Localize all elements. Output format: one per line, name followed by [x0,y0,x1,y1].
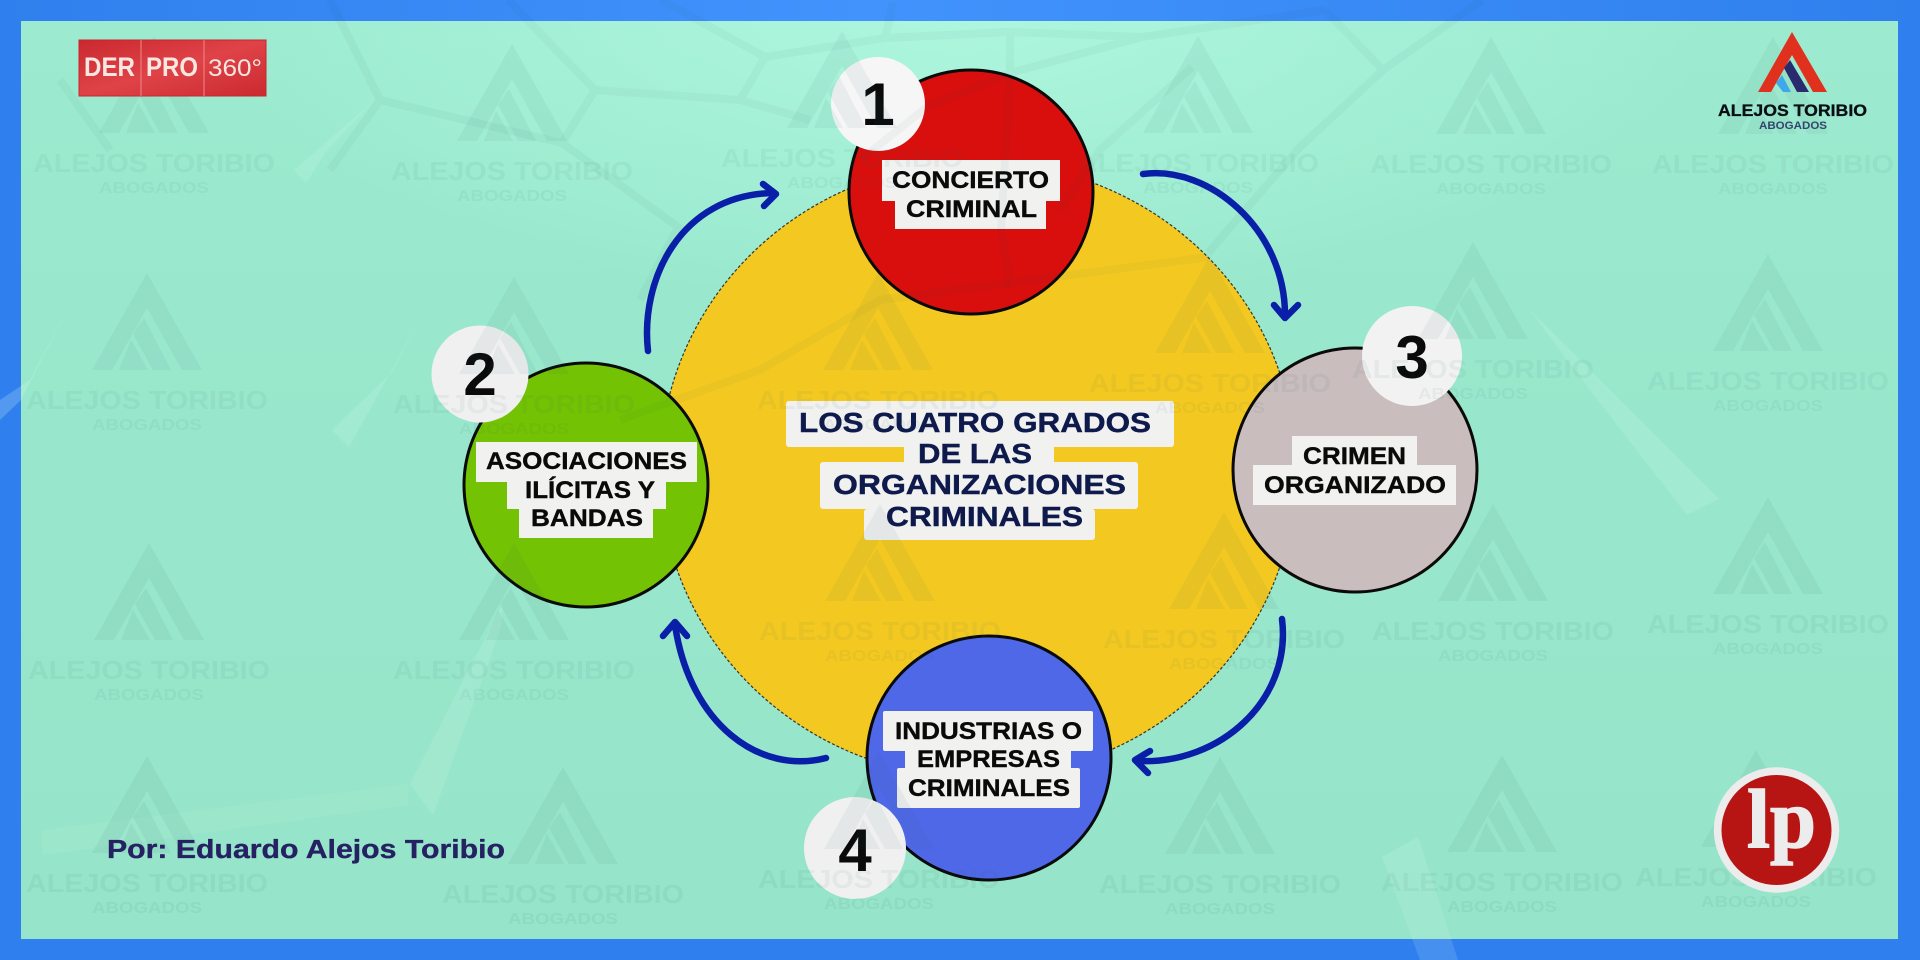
watermark logos pattern: ALEJOS TORIBIO [757,385,999,415]
number badge 1: 1 [861,71,895,138]
arrow: gray to blue [1135,619,1283,773]
watermark logos pattern: ABOGADOS [823,417,933,434]
number badge 2 [432,326,528,422]
watermark logos pattern: ABOGADOS [1418,386,1528,403]
number badge 4 [804,797,906,899]
watermark logos pattern: ALEJOS TORIBIO [721,143,963,173]
panel: industrias o empresas criminales [867,636,1111,880]
central yellow circle [660,162,1296,778]
watermark logos pattern: ABOGADOS [1447,899,1557,916]
watermark logos pattern: ABOGADOS [1713,641,1823,658]
watermark logos pattern: ABOGADOS [1713,398,1823,415]
watermark logos pattern: ALEJOS TORIBIO [442,879,684,909]
panel: concierto criminal [849,70,1093,314]
number badge 1 [831,57,925,151]
watermark logos pattern: ABOGADOS [824,896,934,913]
number badge 3 [1362,306,1462,406]
logo: Alejos Toribio Abogados [1718,32,1867,132]
logo: DER PRO 360 [79,40,266,96]
watermark logos pattern: ALEJOS TORIBIO [1635,862,1877,892]
central title: LOS CUATRO GRADOS [799,407,1151,438]
watermark logos pattern: ALEJOS TORIBIO [759,616,1001,646]
watermark logos pattern: ABOGADOS [787,175,897,192]
watermark logos pattern: ALEJOS TORIBIO [33,148,275,178]
watermark logos pattern: ALEJOS TORIBIO [1089,368,1331,398]
number badge 2: 2 [463,341,497,408]
logo: Alejos Toribio Abogados: ABOGADOS [1759,120,1827,132]
watermark logos pattern: ABOGADOS [825,648,935,665]
central title: DE LAS [918,438,1032,469]
number badge 3: 3 [1395,324,1429,391]
watermark logos pattern: ALEJOS TORIBIO [393,389,635,419]
logo: DER PRO 360: PRO [146,52,198,82]
watermark logos pattern: ABOGADOS [1436,181,1546,198]
watermark logos pattern: ABOGADOS [1165,901,1275,918]
watermark logos pattern: ALEJOS TORIBIO [28,655,270,685]
watermark logos pattern: ABOGADOS [1155,400,1265,417]
panel: crimen organizado: ORGANIZADO [1264,472,1446,499]
central title: CRIMINALES [886,501,1083,532]
watermark logos pattern: ABOGADOS [459,687,569,704]
panel: industrias o empresas criminales: CRIMINALES [908,775,1070,802]
watermark logos pattern: ALEJOS TORIBIO [758,864,1000,894]
watermark logos pattern: ALEJOS TORIBIO [393,655,635,685]
watermark logos pattern: ALEJOS TORIBIO [1077,148,1319,178]
logo: lp: lp [1747,773,1816,866]
logo: DER PRO 360: DER [84,52,135,82]
watermark logos pattern: ALEJOS TORIBIO [1370,149,1612,179]
logo: DER PRO 360: 360° [208,55,262,82]
logo: lp [1714,767,1839,893]
watermark logos pattern: ABOGADOS [99,180,209,197]
arrow: green to red [647,184,776,351]
watermark logos pattern: ALEJOS TORIBIO [1647,609,1889,639]
watermark logos pattern: ALEJOS TORIBIO [391,156,633,186]
panel: crimen organizado: CRIMEN [1303,443,1406,470]
central title: ORGANIZACIONES [833,469,1126,500]
watermark logos pattern: ALEJOS TORIBIO [1103,624,1345,654]
arrow: blue to green [663,622,826,761]
author credit: Por: Eduardo Alejos Toribio [107,836,505,864]
watermark logos pattern: ALEJOS TORIBIO [1352,354,1594,384]
watermark logos pattern: ABOGADOS [1169,656,1279,673]
panel: asociaciones ilicitas y bandas: BANDAS [531,505,643,532]
watermark logos pattern: ALEJOS TORIBIO [26,385,268,415]
watermark logos pattern: ABOGADOS [94,687,204,704]
panel: asociaciones ilicitas y bandas: ILÍCITAS Y [525,476,655,504]
watermark logos pattern: ABOGADOS [457,188,567,205]
panel: industrias o empresas criminales: EMPRESAS [917,746,1060,773]
watermark logos pattern: ABOGADOS [1143,180,1253,197]
background network lines [60,0,1482,420]
panel: asociaciones ilicitas y bandas: ASOCIACIONES [486,448,687,475]
watermark logos pattern: ALEJOS TORIBIO [1099,869,1341,899]
watermark logos pattern: ALEJOS TORIBIO [1652,149,1894,179]
watermark logos pattern: ABOGADOS [1438,648,1548,665]
arrow: red to gray [1143,173,1298,318]
watermark logos pattern: ALEJOS TORIBIO [1381,867,1623,897]
watermark logos pattern: ABOGADOS [508,911,618,928]
watermark logos pattern: ABOGADOS [1718,181,1828,198]
panel: concierto criminal: CRIMINAL [906,196,1037,223]
central title [786,401,1174,540]
watermark logos pattern: ABOGADOS [92,417,202,434]
watermark logos pattern: ABOGADOS [1701,894,1811,911]
watermark logos pattern: ALEJOS TORIBIO [1647,366,1889,396]
watermark logos pattern: ABOGADOS [459,421,569,438]
logo: Alejos Toribio Abogados: ALEJOS TORIBIO [1718,102,1867,120]
panel: asociaciones ilicitas y bandas [464,363,708,607]
watermark logos pattern: ALEJOS TORIBIO [26,868,268,898]
watermark logos pattern: ALEJOS TORIBIO [1372,616,1614,646]
panel: industrias o empresas criminales: INDUSTRIAS O [895,718,1082,745]
watermark logos pattern: ABOGADOS [92,900,202,917]
number badge 4: 4 [838,817,872,884]
panel: concierto criminal: CONCIERTO [892,167,1049,194]
panel: crimen organizado [1233,348,1477,592]
